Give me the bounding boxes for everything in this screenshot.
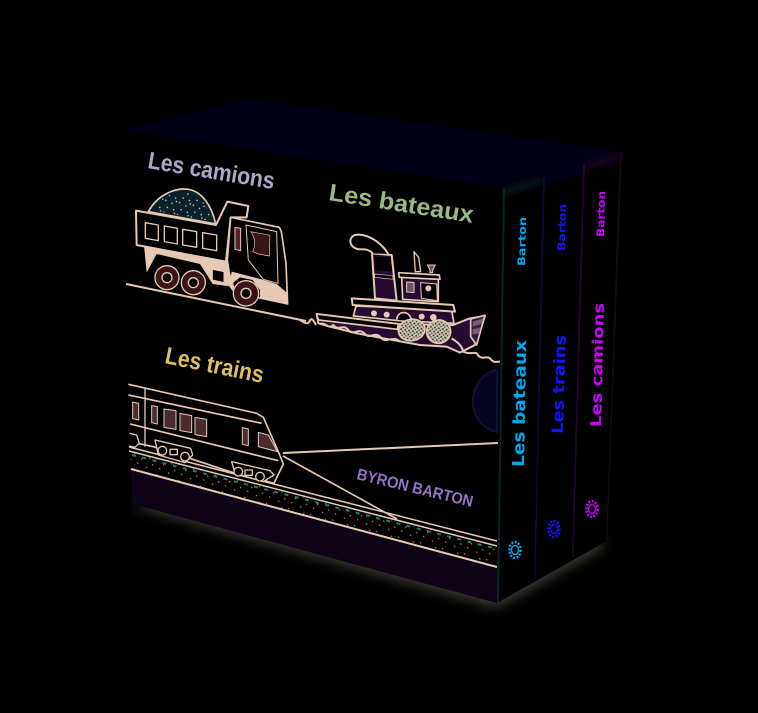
cab vent <box>235 227 241 251</box>
spine edge: trains <box>534 177 545 580</box>
grille square <box>212 269 224 283</box>
headlight beams <box>283 443 498 519</box>
spine tint: bateaux <box>503 177 543 196</box>
truck cab <box>227 217 288 304</box>
spine title: Les trains: Les trains <box>548 335 570 434</box>
track ballast <box>130 452 497 566</box>
mast and horn <box>414 252 435 273</box>
hull scallops <box>320 324 400 342</box>
icon: dump truck <box>136 189 288 306</box>
bogie: rear <box>155 440 193 463</box>
deck rail <box>317 314 398 329</box>
title: Les bateaux: Les bateaux <box>327 179 476 229</box>
spine author: camions: Barton <box>595 191 608 237</box>
hull <box>317 314 485 353</box>
portholes <box>371 310 437 321</box>
spine author: trains: Barton <box>556 204 569 251</box>
bumper and fender <box>229 272 288 304</box>
cab door <box>246 225 278 283</box>
notch: thumb tab <box>473 370 497 432</box>
icon: tugboat <box>300 235 500 362</box>
panel: spines <box>497 152 622 603</box>
icon: train <box>128 384 283 483</box>
bogie: back car <box>129 433 139 447</box>
wave under bow <box>452 338 500 362</box>
spine title: Les bateaux: Les bateaux <box>509 339 530 467</box>
spine tint: trains <box>544 165 583 184</box>
gravel load <box>148 189 216 224</box>
tire arch <box>397 313 412 321</box>
author: Byron Barton: BYRON BARTON <box>355 466 475 511</box>
spine author: bateaux: Barton <box>516 217 529 266</box>
dump bed <box>136 202 248 262</box>
icon: logo camions <box>586 501 598 517</box>
windows <box>133 402 277 452</box>
smoke <box>350 235 388 254</box>
ground line under truck <box>126 284 306 321</box>
driver <box>251 232 270 256</box>
spine edge: camions <box>572 164 585 558</box>
waist line <box>130 424 278 461</box>
bogie: front <box>232 462 274 482</box>
water line left <box>300 319 316 325</box>
title: Les camions: Les camions <box>146 147 277 195</box>
tail fin <box>471 315 485 345</box>
spine edge: bateaux <box>497 188 505 603</box>
bed panels <box>145 223 217 251</box>
icon: logo trains <box>548 521 560 537</box>
spine outer edge <box>606 152 622 541</box>
spine tint: camions <box>584 153 621 171</box>
door line <box>143 388 147 447</box>
icon: logo bateaux <box>510 542 520 558</box>
bow tires <box>397 317 452 345</box>
train body <box>128 384 283 483</box>
railway track <box>129 447 497 567</box>
spine title: Les camions: Les camions <box>587 303 608 427</box>
truck beige underbody <box>144 245 235 287</box>
truck wheels <box>155 266 259 306</box>
roof line <box>128 395 262 423</box>
panel: top of box <box>122 99 622 188</box>
superstructure <box>353 306 454 323</box>
panel: front of box <box>122 130 503 603</box>
wheelhouse <box>399 273 440 302</box>
base strip <box>131 470 497 603</box>
title: Les trains: Les trains <box>163 342 266 389</box>
funnel <box>372 253 397 301</box>
cabin roof ledge <box>352 298 455 312</box>
ground glow <box>134 480 607 606</box>
